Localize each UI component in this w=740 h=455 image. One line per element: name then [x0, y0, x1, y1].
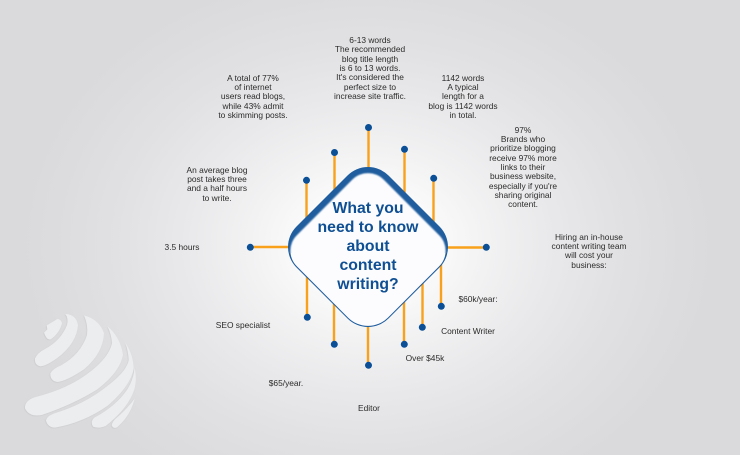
text: readers fact: users read blogs, [221, 91, 285, 101]
title: writing? [337, 276, 399, 293]
text: backlinks fact: receive 97% more [489, 153, 557, 163]
text: writing time fact [186, 164, 248, 203]
text: backlinks fact: links to their [501, 162, 545, 172]
text: in-house cost fact: business: [571, 260, 607, 270]
text: title length fact: It's considered the [336, 72, 404, 82]
text: writing time fact: An average blog [186, 164, 248, 174]
title: What you [332, 200, 404, 217]
text: blog length fact [428, 72, 498, 120]
text: readers fact: while 43% admit [222, 101, 283, 111]
text: readers fact: A total of 77% [227, 72, 279, 82]
text: writing time fact: and a half hours [187, 183, 247, 193]
title: about [346, 238, 390, 255]
text: backlinks fact [489, 124, 557, 209]
text: in-house cost fact: content writing team [552, 241, 626, 251]
text: in-house cost fact: Hiring an in-house [555, 232, 623, 242]
text: in-house cost fact [552, 232, 626, 270]
text: blog length fact: A typical [447, 82, 479, 92]
text: readers fact [218, 72, 288, 120]
text: backlinks fact: Brands who [501, 134, 545, 144]
graphics layer [24, 124, 490, 428]
text: title length fact: is 6 to 13 words. [340, 63, 400, 73]
label: SEO specialist: SEO specialist [216, 320, 270, 330]
label: 3.5 hours: 3.5 hours [165, 242, 199, 252]
text: blog length fact: 1142 words [442, 72, 484, 82]
text: readers fact: to skimming posts. [218, 110, 288, 120]
icon: globe watermark [25, 314, 136, 428]
label: over $45k: Over $45k [406, 352, 444, 362]
text: backlinks fact: content. [508, 199, 538, 209]
text: backlinks fact: prioritize blogging [490, 143, 556, 153]
title [318, 200, 418, 293]
label: $65/year: $65/year. [269, 378, 303, 388]
text: writing time fact: to write. [202, 193, 232, 203]
text: backlinks fact: business website, [490, 171, 556, 181]
label: content writer: Content Writer [441, 326, 495, 336]
text: backlinks fact: sharing original [495, 190, 551, 200]
text: blog length fact: length for a [442, 91, 484, 101]
connector lines and dots [247, 124, 490, 369]
text: writing time fact: post takes three [187, 174, 247, 184]
title: need to know [318, 219, 418, 236]
text: title length fact: 6-13 words [349, 34, 391, 44]
text: title length fact: blog title length [342, 54, 398, 64]
text: title length fact: perfect size to [344, 82, 396, 92]
label: editor: Editor [358, 402, 380, 412]
text: in-house cost fact: will cost your [565, 250, 613, 260]
text: blog length fact: blog is 1142 words [428, 101, 498, 111]
text: blog length fact: in total. [449, 110, 476, 120]
text: backlinks fact: especially if you're [489, 181, 557, 191]
title: content [339, 257, 397, 274]
text: readers fact: of internet [234, 82, 272, 92]
text: backlinks fact: 97% [515, 124, 531, 134]
text: title length fact [334, 34, 406, 101]
label: $60k/year: $60k/year: [458, 294, 498, 304]
text: title length fact: The recommended [335, 44, 405, 54]
central rounded diamond [288, 167, 448, 327]
text: title length fact: increase site traffic. [334, 91, 406, 101]
